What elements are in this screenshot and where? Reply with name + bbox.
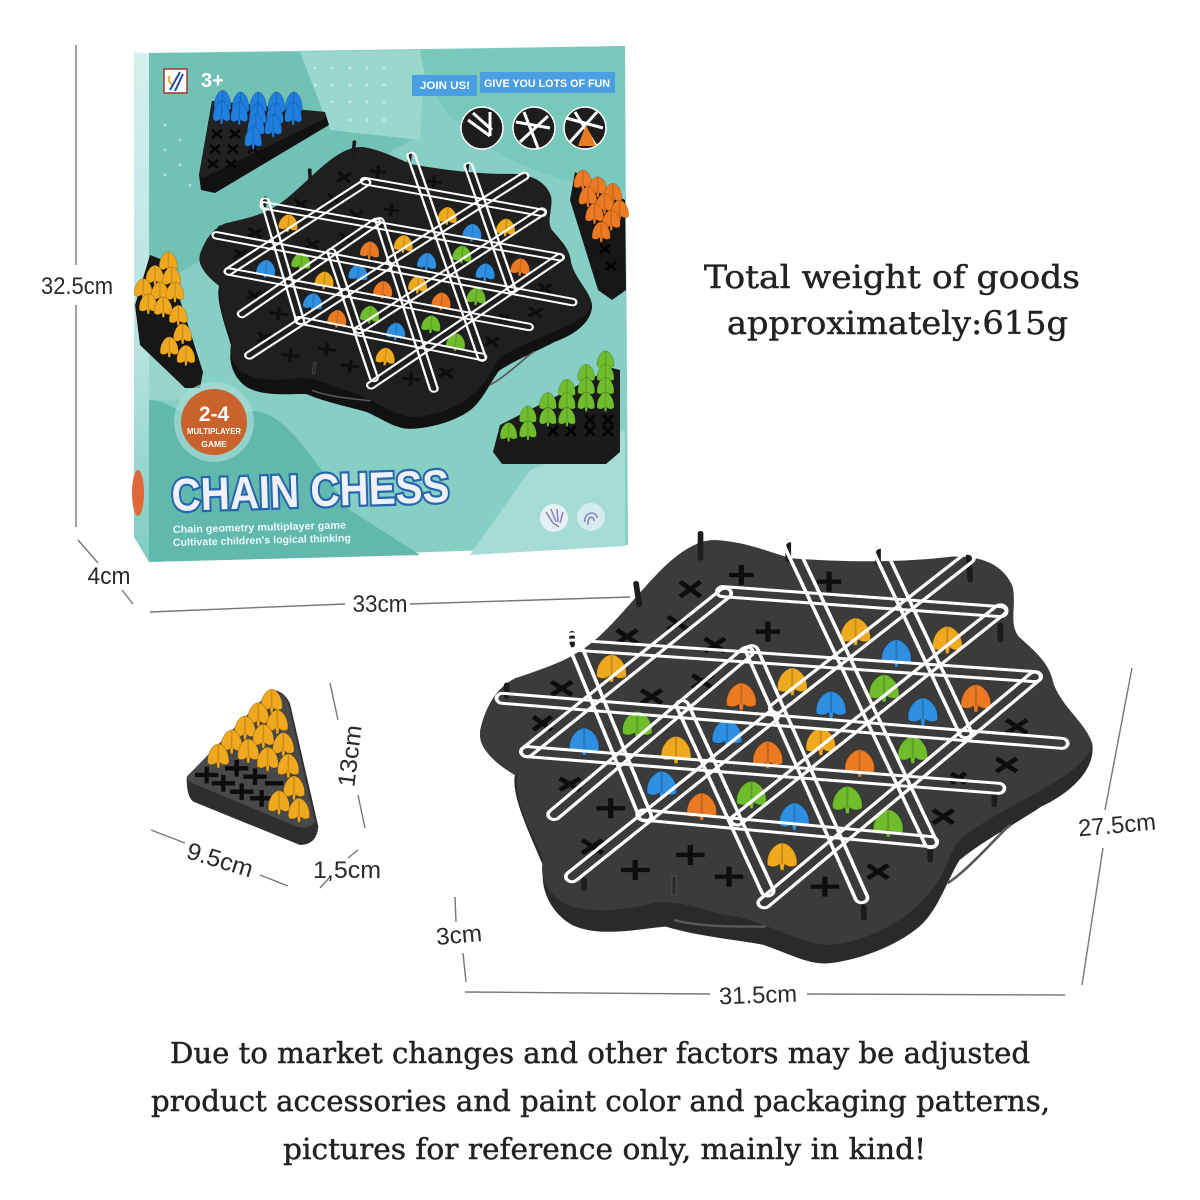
green tray — [493, 351, 620, 464]
dimension: tray height: 1,5cm — [313, 857, 381, 884]
disclaimer — [151, 1036, 1050, 1166]
dimension: box width: 33cm — [352, 591, 408, 618]
hand icons — [540, 503, 605, 532]
blue tray — [199, 90, 329, 193]
box spine — [134, 52, 149, 562]
box tagline: Chain geometry multiplayer game — [173, 519, 346, 536]
main board photo — [480, 533, 1093, 963]
packaging box — [132, 46, 629, 562]
dimension: board width — [465, 981, 1065, 1010]
dimension: board height: 3cm — [435, 920, 483, 951]
disclaimer: Due to market changes and other factors may be adjusted — [170, 1036, 1030, 1070]
disclaimer: product accessories and paint color and packaging patterns, — [151, 1084, 1050, 1118]
box front artwork — [149, 46, 628, 562]
join us banners: GIVE YOU LOTS OF FUN — [484, 78, 610, 90]
player count badge: 2-4 — [199, 403, 229, 426]
player tray photo — [187, 689, 318, 845]
spine badge — [132, 470, 144, 516]
dimension: box height: 32.5cm — [41, 273, 113, 300]
yellow tray — [134, 252, 203, 388]
dimension: tray width — [151, 830, 288, 886]
age label: 3+ — [201, 70, 224, 92]
weight note — [704, 258, 1080, 342]
dimension: board height — [435, 897, 483, 982]
dimension: board width: 31.5cm — [719, 981, 797, 1010]
player count badge — [174, 382, 254, 462]
dimension: tray height — [313, 850, 381, 888]
join us banners: JOIN US! — [420, 80, 470, 92]
brand logo — [164, 69, 187, 93]
box board illustration — [184, 127, 606, 447]
join us banners — [412, 72, 615, 96]
disclaimer: pictures for reference only, mainly in kind! — [283, 1132, 926, 1166]
weight note: Total weight of goods — [704, 258, 1080, 296]
box tagline — [173, 519, 351, 549]
dimension: board depth — [1077, 668, 1157, 985]
dimension: box depth: 4cm — [88, 563, 130, 590]
box tagline: Cultivate children's logical thinking — [173, 532, 351, 549]
dimension: box depth — [78, 540, 133, 604]
game title: CHAIN CHESS — [171, 460, 450, 521]
weight note: approximately:615g — [727, 304, 1068, 342]
step circles — [461, 107, 606, 149]
dimension: tray length — [330, 683, 368, 828]
dimension: tray width: 9.5cm — [183, 838, 256, 883]
player count badge: MULTIPLAYER — [187, 426, 241, 436]
dimension: board depth: 27.5cm — [1077, 809, 1157, 842]
dimension: tray length: 13cm — [333, 724, 368, 788]
dimension: box width — [150, 591, 630, 618]
player count badge: GAME — [201, 439, 227, 449]
orange tray — [570, 170, 629, 300]
